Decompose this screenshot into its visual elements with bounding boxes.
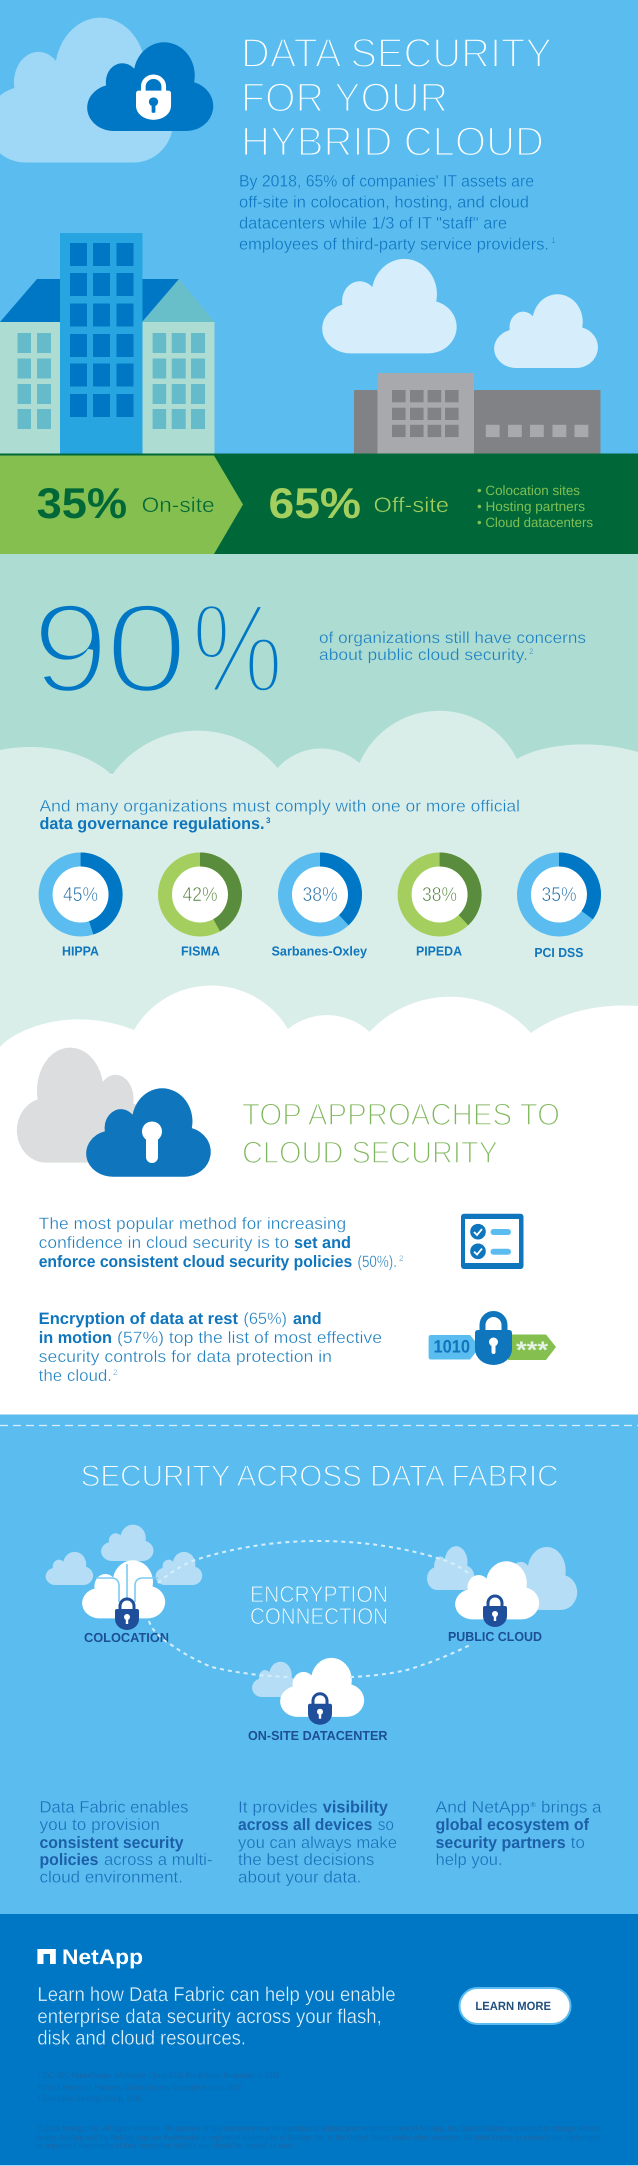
text: encryption: security controls for data protection in [39, 1348, 332, 1366]
text: consistent policies: 2 [399, 1254, 404, 1263]
regulations heading [40, 798, 520, 833]
panel: footer [0, 1914, 638, 2166]
text: consistent policies: confidence in cloud security is to [39, 1234, 289, 1252]
off-site list: • Cloud datacenters [477, 515, 593, 530]
column: ecosystem: global ecosystem of [436, 1816, 589, 1834]
column: ecosystem: And NetApp [436, 1799, 530, 1817]
icon: encryption padlock with tags: 1010 [434, 1337, 470, 1357]
panel: hero sky [0, 0, 638, 454]
panel: regulations cloud [0, 711, 638, 1050]
heading: top approaches: CLOUD SECURITY [242, 1135, 498, 1170]
button: learn more [460, 1988, 570, 2024]
text: consistent policies [39, 1215, 404, 1271]
footnotes: ³ Enterprise Strategy Group, 2016 [38, 2094, 142, 2103]
90% description [319, 630, 586, 664]
regulations heading: data governance regulations. [40, 815, 264, 833]
column: visibility: visibility [323, 1799, 389, 1817]
column: visibility [238, 1799, 397, 1887]
donut: HIPPA 45%: HIPPA [62, 944, 100, 959]
heading: top approaches [242, 1097, 560, 1170]
icon: grey and blue keyhole clouds [17, 1048, 211, 1177]
text: consistent policies: set and [294, 1234, 351, 1252]
heading: security across data fabric: SECURITY ACROSS DATA FABRIC [81, 1460, 559, 1493]
cluster: on-site datacenter [248, 1658, 388, 1743]
cluster: colocation [46, 1525, 202, 1645]
text: encryption [39, 1310, 382, 1385]
stat: 65% off-site: 65% [268, 480, 361, 528]
label: encryption connection: ENCRYPTION [250, 1581, 388, 1607]
column: visibility: so [378, 1816, 394, 1834]
footnotes [38, 2071, 280, 2103]
donut: FISMA 42%: FISMA [181, 944, 221, 959]
donut: FISMA 42%: 42% [182, 884, 218, 906]
footnotes: ¹ IDC, IDC FutureScape: Worldwide Cloud 2016 Predictions, November 4, 2015 [38, 2071, 280, 2080]
column: data fabric: Data Fabric enables [40, 1799, 188, 1817]
icon: large pale cloud [0, 18, 173, 163]
footnotes: ² Cloud Research Partners, Cloud Security Spotlight Report, 2015 [38, 2083, 242, 2092]
donut: Sarbanes-Oxley 38%: 38% [302, 884, 338, 906]
title: DATA SECURITY [241, 30, 552, 76]
column: data fabric [40, 1799, 212, 1887]
90% description: 2 [529, 647, 534, 656]
intro text: off-site in colocation, hosting, and cloud [239, 194, 529, 212]
regulations heading: 3 [266, 816, 271, 825]
column: ecosystem: security partners [436, 1834, 566, 1852]
column: ecosystem: help you. [436, 1851, 503, 1869]
stat: 65% off-site: Off-site [374, 494, 449, 517]
donut: PCI DSS 35%: 35% [542, 884, 577, 906]
column: visibility: the best decisions [238, 1851, 374, 1869]
intro text: datacenters while 1/3 of IT "staff" are [239, 214, 507, 232]
column: ecosystem: brings a [541, 1799, 602, 1817]
donut: PCI DSS 35% [524, 860, 594, 960]
title [241, 30, 552, 164]
text: encryption: (65%) [243, 1310, 287, 1328]
legal text: or registered trademarks of their respective holders and should be treated as such. [37, 2141, 295, 2150]
panel: security across data fabric [0, 1414, 638, 1914]
column: data fabric: you to provision [40, 1816, 160, 1834]
text: consistent policies: enforce consistent cloud security policies [39, 1253, 352, 1271]
big number 90% [32, 577, 283, 719]
intro text [239, 172, 556, 254]
text: encryption: in motion [39, 1329, 112, 1347]
dashed encryption connection arcs [149, 1541, 470, 1677]
column: visibility: across all devices [238, 1816, 372, 1834]
heading: top approaches: TOP APPROACHES TO [242, 1097, 560, 1132]
call to action text: disk and cloud resources. [37, 2028, 246, 2050]
label: encryption connection [250, 1581, 388, 1629]
stat: 65% off-site [268, 480, 449, 528]
icon: grey datacenter building [354, 373, 600, 454]
text: encryption: the cloud. [39, 1367, 112, 1385]
button: learn more: LEARN MORE [475, 1999, 551, 2013]
column: visibility: about your data. [238, 1869, 361, 1887]
label: encryption connection: CONNECTION [250, 1603, 388, 1629]
panel: top approaches [0, 986, 638, 1415]
cluster: colocation: COLOCATION [84, 1630, 169, 1645]
icon: encryption padlock with tags: *** [516, 1337, 549, 1364]
column: ecosystem: ® [530, 1802, 536, 1809]
off-site list: • Hosting partners [477, 499, 585, 514]
column: data fabric: consistent security [40, 1834, 184, 1852]
stat: 35% on-site: 35% [37, 480, 127, 528]
icon: dark cloud with padlock [87, 42, 213, 131]
title: FOR YOUR [241, 74, 448, 120]
column: data fabric: policies [40, 1851, 98, 1869]
text: encryption: and [293, 1310, 322, 1328]
call to action text [37, 1984, 396, 2050]
column: data fabric: cloud environment. [40, 1869, 183, 1887]
legal text [37, 2124, 601, 2150]
donut: PCI DSS 35%: PCI DSS [534, 945, 584, 960]
90% description: of organizations still have concerns [319, 630, 586, 647]
cluster: public cloud [427, 1546, 577, 1644]
big number 90%: 0 [105, 577, 188, 719]
column: ecosystem: to [571, 1834, 585, 1852]
donut: PIPEDA 38%: PIPEDA [416, 944, 463, 959]
off-site list [477, 483, 593, 530]
icon: white cloud small [494, 294, 598, 368]
panel: on-site vs off-site band [0, 454, 638, 554]
cluster: public cloud: PUBLIC CLOUD [448, 1629, 542, 1644]
column: visibility: you can always make [238, 1834, 397, 1852]
donut: HIPPA 45% [46, 860, 116, 959]
text: consistent policies: (50%). [358, 1253, 397, 1271]
title: HYBRID CLOUD [241, 118, 544, 164]
text: encryption: 2 [113, 1368, 118, 1377]
donut: Sarbanes-Oxley 38%: Sarbanes-Oxley [272, 944, 368, 959]
cluster: on-site datacenter: ON-SITE DATACENTER [248, 1728, 388, 1743]
text: encryption: Encryption of data at rest [39, 1310, 239, 1328]
donut: Sarbanes-Oxley 38% [272, 860, 368, 959]
intro text: 1 [551, 236, 556, 245]
icon: encryption padlock with tags [429, 1314, 556, 1365]
text: consistent policies: The most popular method for increasing [39, 1215, 346, 1233]
off-site list: • Colocation sites [477, 483, 580, 498]
stat: 35% on-site [37, 480, 215, 528]
big number 90%: % [192, 577, 283, 719]
logo: NetApp: NetApp [62, 1946, 143, 1969]
column: ecosystem [436, 1799, 602, 1869]
intro text: By 2018, 65% of companies' IT assets are [239, 172, 534, 190]
stat: 35% on-site: On-site [142, 494, 215, 517]
donut: PIPEDA 38%: 38% [422, 884, 457, 906]
column: data fabric: across a multi- [104, 1851, 212, 1869]
panel: mint 90 percent [0, 554, 638, 774]
donut: PIPEDA 38% [405, 860, 475, 959]
intro text: employees of third-party service providers. [239, 236, 549, 254]
icon: checklist [461, 1214, 524, 1269]
call to action text: Learn how Data Fabric can help you enable [37, 1984, 396, 2006]
donut: HIPPA 45%: 45% [63, 884, 98, 906]
call to action text: enterprise data security across your flash, [37, 2006, 382, 2028]
icon: white cloud large [322, 259, 457, 353]
regulations heading: And many organizations must comply with one or more official [40, 798, 520, 816]
donut: FISMA 42% [165, 860, 235, 959]
big number 90%: 9 [32, 577, 109, 719]
icon: city buildings [0, 233, 214, 454]
column: visibility: It provides [238, 1799, 318, 1817]
text: encryption: (57%) top the list of most effective [117, 1329, 382, 1347]
90% description: about public cloud security. [319, 647, 528, 664]
